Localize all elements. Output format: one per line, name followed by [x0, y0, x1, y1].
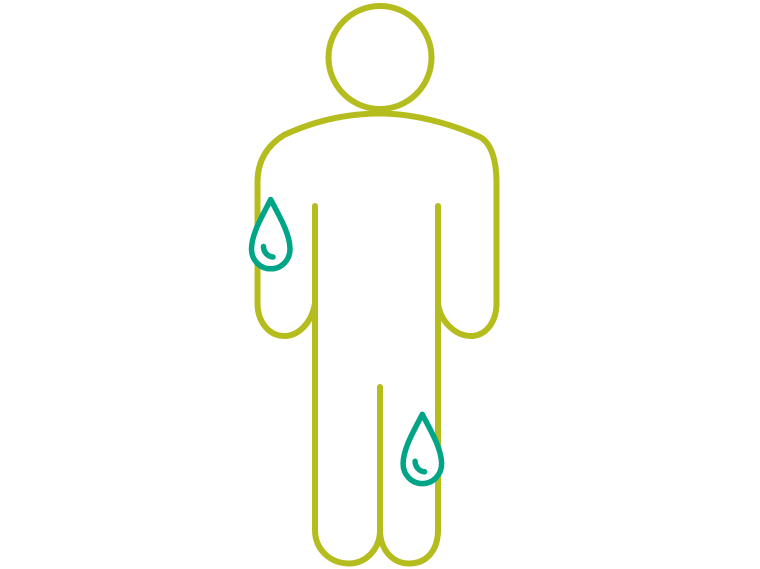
left body and leg	[315, 206, 380, 564]
head	[328, 6, 432, 109]
figure outline	[258, 6, 496, 564]
icon: water drop on arm	[252, 200, 290, 269]
icon: water drop on leg	[403, 414, 442, 484]
right body and leg	[380, 206, 438, 564]
body and arms	[258, 114, 496, 336]
